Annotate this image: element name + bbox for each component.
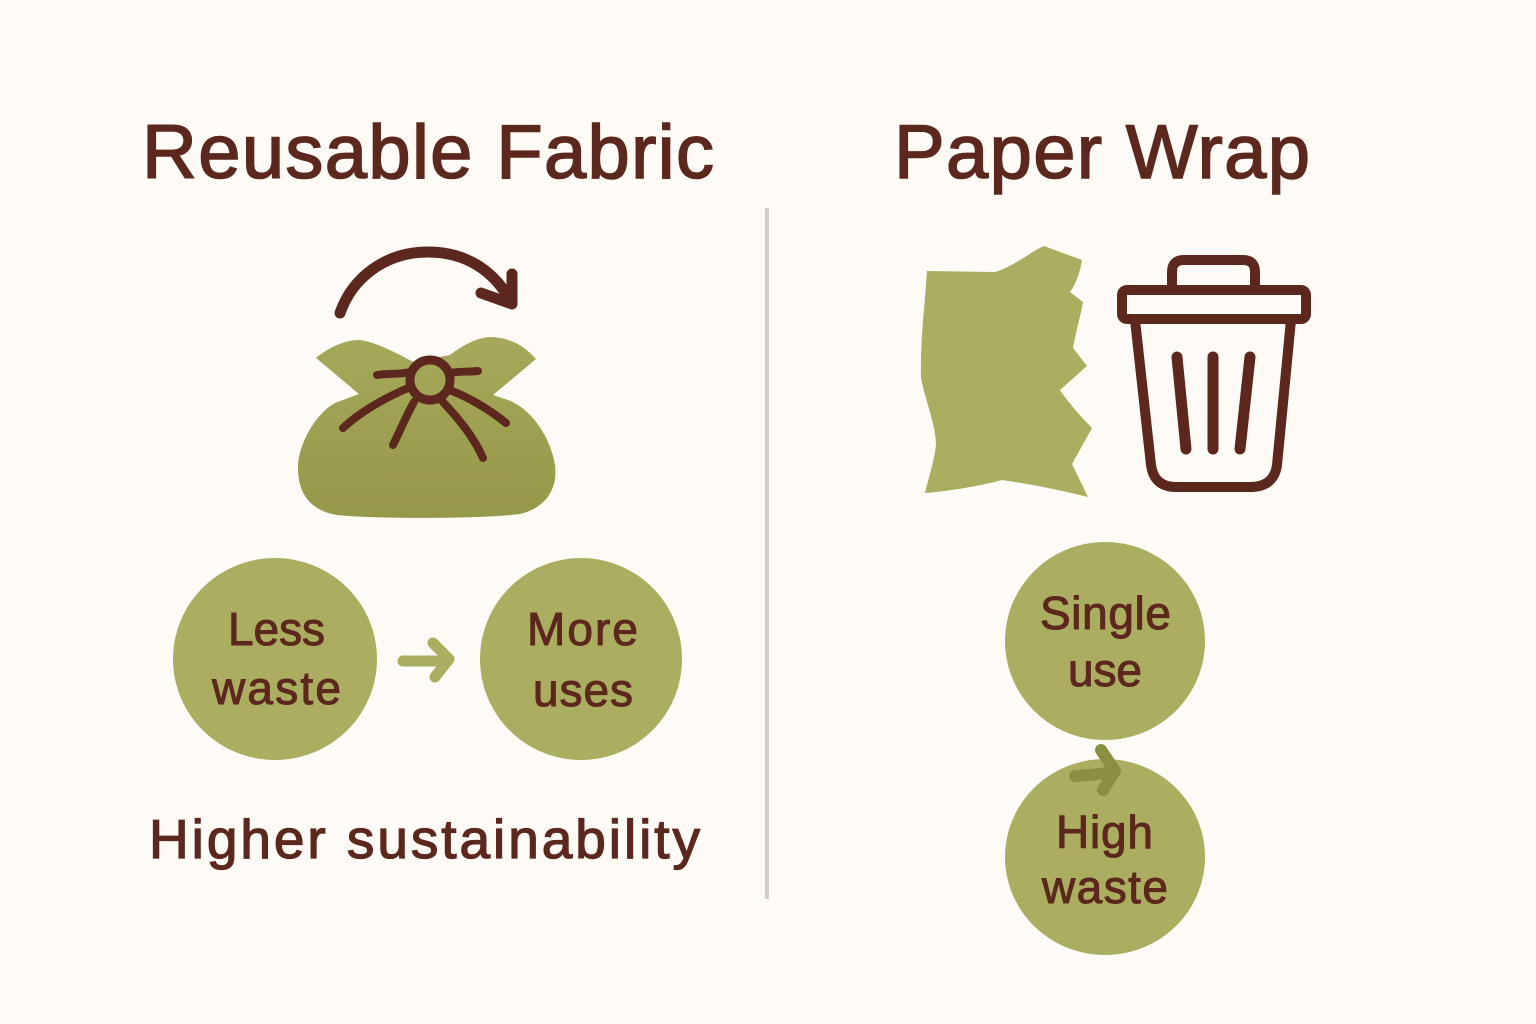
badge: Less waste: waste	[211, 662, 341, 714]
badge: Single use: use	[1068, 644, 1142, 696]
icon: trash can	[1122, 260, 1306, 487]
badge: High waste	[1005, 759, 1205, 955]
caption: Higher sustainability: Higher sustainability	[149, 808, 700, 870]
badge: More uses: More	[527, 603, 638, 655]
heading: Reusable Fabric: Reusable Fabric	[142, 110, 714, 195]
badge: Single use	[1005, 542, 1205, 740]
icon: reuse arrow	[340, 252, 512, 313]
badge: High waste: waste	[1041, 861, 1168, 913]
icon: torn paper	[921, 246, 1092, 497]
arrow: less waste to more uses	[403, 643, 449, 677]
badge: Less waste	[173, 558, 377, 760]
panel divider	[765, 208, 769, 899]
arrow: single use to high waste	[1075, 750, 1115, 790]
badge: Single use: Single	[1040, 587, 1171, 639]
badge: Less waste: Less	[228, 603, 325, 655]
heading: Paper Wrap: Paper Wrap	[894, 110, 1310, 195]
badge: High waste: High	[1056, 806, 1153, 858]
badge: More uses: uses	[533, 664, 633, 716]
badge: More uses	[480, 558, 682, 760]
icon: fabric bundle	[298, 337, 555, 518]
